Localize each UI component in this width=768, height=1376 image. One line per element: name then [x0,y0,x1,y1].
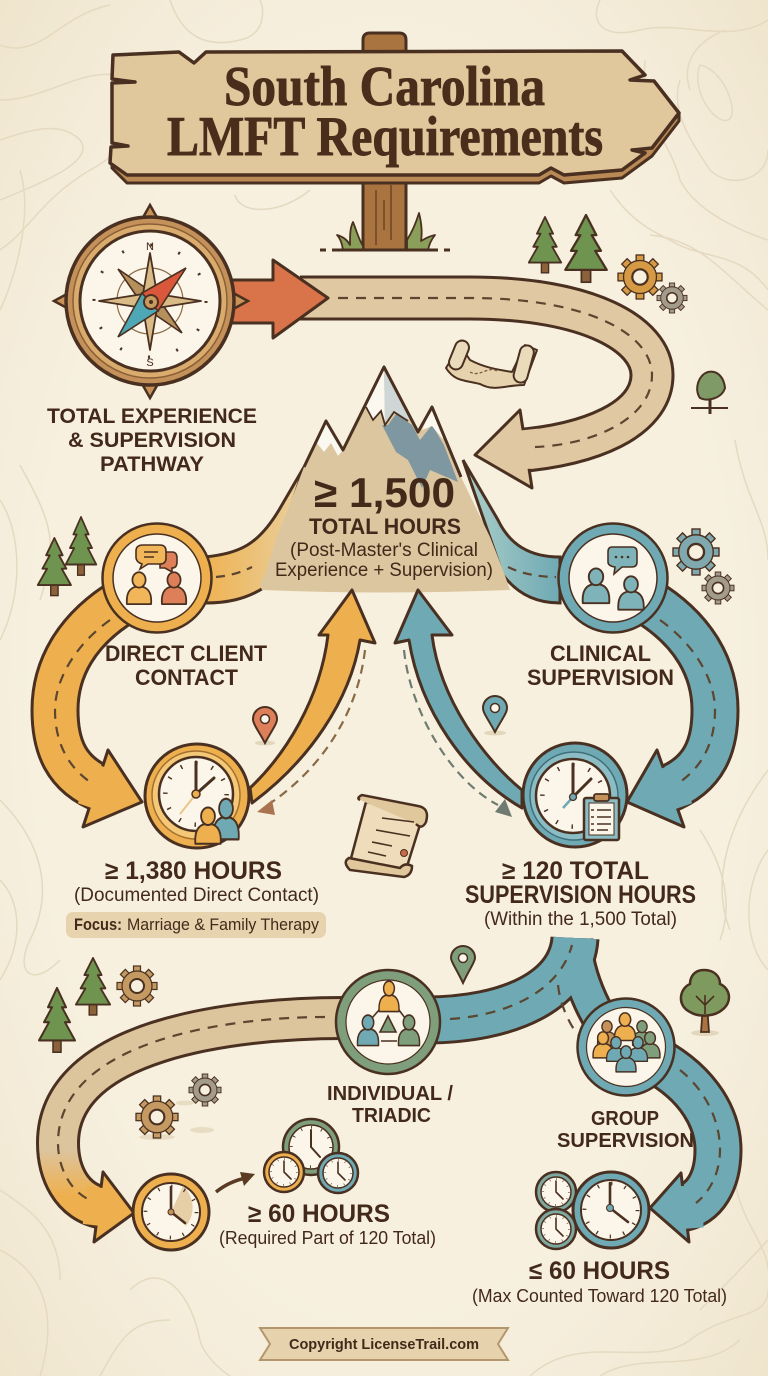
middle gears [136,1074,221,1140]
top gears [618,255,687,313]
compass [54,205,248,398]
clinical supervision label: CLINICAL [550,641,651,666]
group supervision node [578,998,674,1096]
right gears [673,529,734,604]
teal loop arrow down [627,600,715,827]
summit label [275,469,493,581]
yellow arrow up to summit [250,590,375,803]
small arrow to clock cluster [216,1172,255,1192]
individual triadic label: TRIADIC [352,1105,431,1127]
individual triadic node [336,970,440,1074]
icon: orange pin [253,707,277,746]
direct client label [105,641,268,690]
yellow loop arrow down [55,600,142,827]
compass label [47,405,257,476]
focus pill: Marriage & Family Therapy [127,915,319,934]
direct contact hours [74,857,319,906]
title: South Carolina [224,56,545,118]
compass label: & SUPERVISION [68,429,236,452]
focus pill: Focus: [74,915,122,934]
compass label: TOTAL EXPERIENCE [47,405,257,428]
icon: certificate scroll [346,795,427,877]
focus pill [66,912,326,938]
left clock with people [145,744,249,848]
compass: N [146,241,154,253]
direct contact hours: ≥ 1,380 HOURS [105,857,282,885]
summit label: Experience + Supervision) [275,560,493,581]
total supervision hours: ≥ 120 TOTAL [502,857,649,885]
total supervision hours: (Within the 1,500 Total) [484,909,677,930]
summit label: TOTAL HOURS [309,514,461,539]
red arrow [232,260,328,338]
summit label: (Post-Master's Clinical [290,540,478,561]
group hours label [472,1257,727,1306]
direct client contact node [102,524,212,632]
total supervision hours [465,857,696,930]
left pines [38,517,96,596]
direct contact hours: (Documented Direct Contact) [74,885,319,906]
map scroll [446,338,537,388]
copyright banner: Copyright LicenseTrail.com [289,1336,479,1353]
icon: green pin [451,946,475,983]
right clock with clipboard [523,743,627,847]
copyright banner [260,1328,508,1360]
signpost post [320,33,450,250]
summit label: ≥ 1,500 [314,469,455,516]
individual triadic label: INDIVIDUAL / [327,1083,453,1105]
round tree [681,970,729,1036]
small clock [133,1174,209,1250]
compass label: PATHWAY [100,453,204,476]
individual triadic label [327,1083,453,1127]
group hours label: ≤ 60 HOURS [529,1257,670,1285]
mountain summit [261,367,510,592]
top trees [529,215,607,282]
group hours label: (Max Counted Toward 120 Total) [472,1286,727,1306]
individual hours label [219,1200,436,1248]
small tree right [691,372,728,414]
clock cluster [264,1119,358,1193]
title [167,56,603,168]
teal arrow up to summit [395,590,522,808]
individual hours label: ≥ 60 HOURS [248,1200,390,1228]
lower teal road [425,938,625,1050]
group supervision label: GROUP [591,1108,659,1130]
dashed return arrow left [257,650,365,815]
compass: S [146,357,154,369]
yellow road to summit [205,467,304,603]
title sign board [110,51,679,183]
dashed return arrow right [404,650,512,817]
icon: teal pin [483,696,507,736]
lower tan road arrow [58,1017,345,1242]
clinical supervision label [527,641,674,690]
group road arrow [650,1060,720,1242]
individual hours label: (Required Part of 120 Total) [219,1228,436,1248]
teal road to summit [463,460,560,603]
clinical supervision node [558,524,668,632]
group supervision label: SUPERVISION [557,1130,694,1152]
top trail road [300,298,652,488]
direct client label: DIRECT CLIENT [105,641,268,666]
direct client label: CONTACT [135,665,239,690]
group supervision label [557,1108,694,1152]
total supervision hours: SUPERVISION HOURS [465,881,696,909]
title: LMFT Requirements [167,106,603,168]
clinical supervision label: SUPERVISION [527,665,674,690]
lower left gear [117,966,157,1006]
group clocks [536,1172,649,1249]
lower left pines [39,958,110,1052]
